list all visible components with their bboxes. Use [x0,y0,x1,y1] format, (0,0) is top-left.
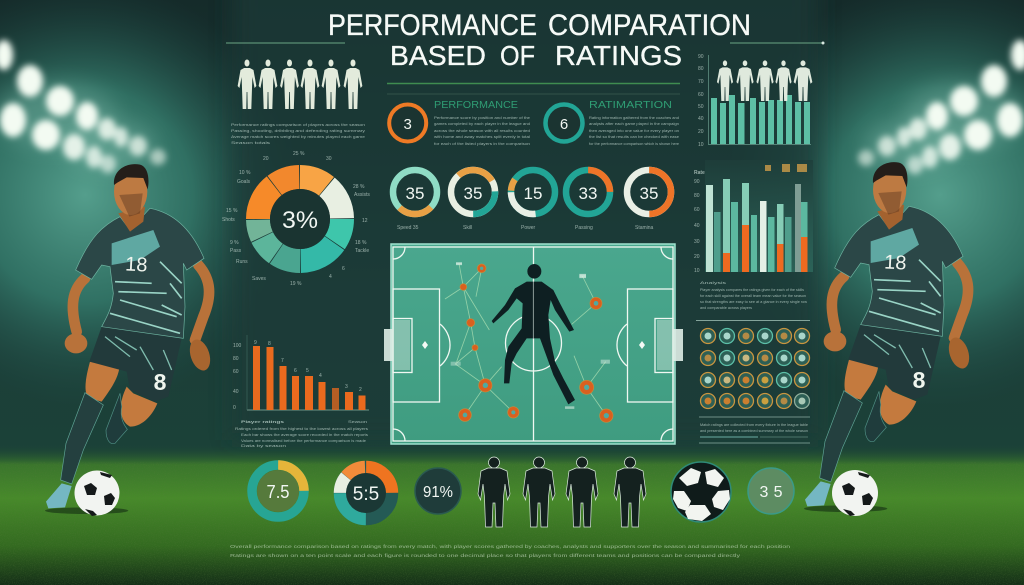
pie chart labels: 25 % [293,151,305,157]
pie chart labels: 20 [263,156,269,162]
pie chart labels: Runs [236,259,248,265]
orange bar chart: 9 [254,340,257,346]
ground shadow [45,507,128,514]
player right [804,162,973,516]
rating ring: performance [389,104,426,142]
top-left text block: Passing, shooting, dribbling and defending rating summary [231,128,365,133]
bottom circle 91% [415,468,461,514]
right stacked bar chart: 80 [694,193,700,199]
title: COMPARATION [548,9,751,42]
right stacked bar chart: 10 [694,268,700,274]
orange bar chart: 7 [281,358,284,364]
shorts [89,327,182,402]
right bar chart with figures: 80 [698,66,704,72]
pie chart labels: 12 [362,218,368,224]
right bar chart with figures: 50 [698,104,704,110]
orange bar chart: 2 [359,387,362,393]
front thigh [85,362,119,402]
bar chart caption: Values are normalised before the performance comparison is made [241,438,367,443]
text block: ratings: the list so that results can be checked with ease [589,134,680,139]
player left [45,164,214,516]
pie chart labels: 30 [326,156,332,162]
heading: performance: PERFORMANCE [434,99,518,111]
pie chart labels: 9 % [230,240,239,246]
donut 5 [626,169,672,215]
player number 18: 18 [884,251,907,275]
top-left player figures [238,60,362,109]
title: BASED [390,40,486,71]
orange bar chart: 8 [268,341,271,347]
right bar chart with figures: 60 [698,92,704,98]
text block: ratings: for the performance comparison which is shown here [589,141,680,146]
short number 8: 8 [913,367,926,393]
short number 8: 8 [154,369,167,395]
silhouette [492,264,575,404]
pie chart labels: 19 % [290,281,302,287]
icon: centre football [671,462,731,522]
right text block: so that strengths are easy to see at a glance in every single row [700,299,807,304]
bottom text lines [230,544,791,558]
score donuts row [384,161,672,223]
lower right text block: Match ratings are collected from every fixture in the league table [700,422,809,427]
right text block: and comparable across players [700,305,752,310]
bottom donut 5:5 [329,456,403,530]
right stacked bar chart: 30 [694,239,700,245]
football [74,470,120,516]
pie chart labels: Saves [252,276,266,282]
donut 2: 35 [464,184,482,203]
donut 5: 35 [640,184,658,203]
rating ring: ratings: 6 [560,116,568,133]
jersey [76,208,204,338]
bar chart caption: Data by season [241,443,286,448]
bottom circle 35: 35 [760,484,783,501]
text block: performance: across the whole season with all results counted [434,128,530,133]
donut captions: Passing [575,225,593,231]
orange bar chart: 100 [233,343,242,349]
pie chart labels: 6 [342,266,345,272]
pie chart labels: 15 % [226,208,238,214]
bar chart caption: Season [348,419,367,424]
title: OF [500,40,535,71]
pie chart: 3% [282,207,318,234]
donut 3 [509,168,557,216]
donut 1: 35 [406,184,424,203]
top-left text block: Season totals [231,140,270,145]
right stacked bar chart: Rate [694,170,705,176]
title: PERFORMANCE [328,9,537,42]
pie chart labels: Assists [354,192,370,198]
text block: performance: with home and away matches split evenly in total [434,134,530,139]
grass field [0,445,1024,585]
bar chart caption: Each bar shows the average score recorded in the match reports [241,432,368,437]
orange bar chart: 80 [233,356,239,362]
bottom circle 35 [748,468,794,514]
right bar chart with figures: 70 [698,79,704,85]
bottom donut 5:5: 5:5 [353,484,379,505]
text block: performance: Performance score by position and number of the [434,115,531,120]
right bar chart with figures: 40 [698,116,704,122]
pie chart labels [222,151,370,287]
text block: performance: games completed by each player in the league and [434,121,530,126]
orange bar chart [233,335,369,411]
right stacked bar chart: 20 [694,254,700,260]
text block: ratings: Rating information gathered from the coaches and [589,115,679,120]
right stacked bar chart [694,160,813,274]
donut 2 [442,161,504,223]
football pitch [384,244,683,444]
orange bar chart: 0 [233,405,236,411]
pie chart labels: Pass [230,248,242,254]
penalty spots [422,341,645,349]
text block: ratings [589,115,680,146]
orange bar chart: 6 [294,368,297,374]
football [832,470,878,516]
bar chart caption: Ratings ordered from the highest to the lowest across all players [235,426,368,431]
text block: performance: for each of the listed players in the comparison [434,141,530,146]
boot [46,483,72,508]
top-left text block: Average match scores weighted by minutes played each game [231,134,366,139]
right stacked bar chart: 60 [694,207,700,213]
bottom silhouettes [478,457,646,527]
icon grid [696,320,810,408]
orange bar chart: 40 [233,389,239,395]
right bar chart with figures [698,54,812,148]
right bar chart with figures: 90 [698,54,704,60]
rating ring: performance: 3 [404,116,412,133]
pie chart labels: 28 % [353,184,365,190]
floodlights left [0,40,166,173]
lower right text block [699,417,810,443]
donut captions: Stamina [635,225,654,231]
pitch markings [393,247,673,441]
pie chart labels: 4 [329,274,332,280]
orange bar chart: 3 [345,384,348,390]
title rules [226,42,824,94]
bottom text lines: Overall performance comparison based on ratings from every match, with player scores gathered by coaches, analysts and supporters over the season and summarised for each position [230,544,791,549]
neck and head [118,207,145,232]
orange bar chart: 4 [319,373,322,379]
donut captions: Power [521,225,536,231]
donut captions [397,225,654,231]
goals [384,320,683,370]
pie chart labels: 10 % [239,170,251,176]
donut 1 [384,161,446,223]
central infographic backdrop [232,0,818,440]
text block: performance [434,115,531,146]
network lines [445,264,606,416]
donut 3: 15 [524,184,542,203]
network nodes [459,264,613,422]
pie chart [241,160,359,278]
right text block [700,280,807,310]
bar chart caption [235,419,368,448]
pie chart labels: Tackle [355,248,369,254]
pitch network and central silhouette [445,262,613,422]
donut 4 [565,169,611,215]
arms [73,278,85,332]
right text block: Analysis [700,280,726,285]
heading: ratings: RATIMARTION [589,100,672,111]
title [328,9,751,71]
right bar chart with figures: 10 [698,142,704,148]
right text block: for each skill against the overall team mean value for the season [700,293,806,298]
donut captions: Skill [463,225,472,231]
front sock [61,393,103,484]
right stacked bar chart: 90 [694,179,700,185]
orange bar chart: 60 [233,369,239,375]
right stacked bar chart: 40 [694,223,700,229]
floodlights right [858,40,1024,174]
pie chart labels: Goals [237,179,251,185]
bottom donut 7.5 [251,464,305,518]
text block: ratings: then averaged into one value for every player on [589,128,679,133]
rear thigh and sock [121,387,157,427]
title: RATINGS [555,40,682,71]
top-left text block: Performance ratings comparison of players across the season [231,122,365,127]
orange bar chart: 5 [306,368,309,374]
lower right text block: and presented here as a combined summary of the whole season [700,428,808,433]
donut 4: 33 [579,184,597,203]
bottom donut 7.5: 7.5 [266,482,290,502]
player number 18: 18 [125,253,148,277]
bottom circle 91%: 91% [423,484,453,501]
pie chart labels: 18 % [355,240,367,246]
right bar chart with figures: 20 [698,129,704,135]
donut captions: Speed 35 [397,225,419,231]
text block: ratings: analysts after each game played in the campaign [589,121,679,126]
bottom text lines: Ratings are shown on a ten point scale and each figure is rounded to one decimal place so that players from different teams and positions can be compared directly [230,553,741,558]
rating ring: ratings [546,104,582,142]
top-left text block [231,122,366,145]
right text block: Player analysis compares the ratings given for each of the skills [700,287,804,292]
bar chart caption: Player ratings [241,419,285,424]
pie chart labels: Shots [222,217,235,223]
